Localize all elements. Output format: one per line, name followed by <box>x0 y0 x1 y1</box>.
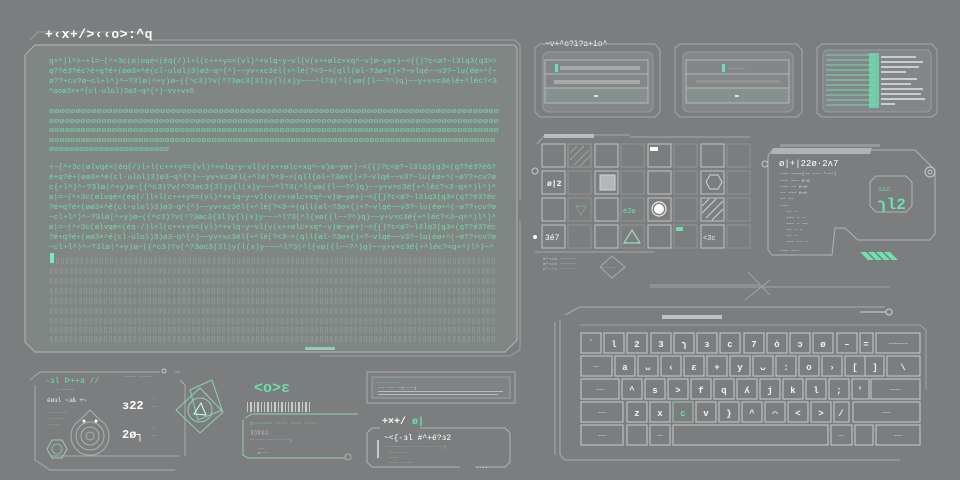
panel: info readout: ~~~ ~~~ ø~ø <box>780 179 810 184</box>
keyboard key labels: ‹ <box>668 363 674 373</box>
stat: 322: ɜ22 <box>122 399 144 413</box>
text block: empty glyph grid: ▯▯▯▯▯▯▯▯▯▯▯▯▯▯▯▯▯▯▯▯▯▯▯▯▯▯▯▯▯▯▯▯▯▯▯▯▯▯▯▯▯▯▯▯▯▯▯▯▯▯▯▯▯▯▯▯▯▯▯▯▯▯▯▯▯▯▯▯▯▯▯▯▯▯▯▯▯▯▯▯▯▯▯▯▯▯▯▯▯▯▯ <box>49 267 496 276</box>
decorative connector <box>650 272 890 300</box>
panel: green data list <box>817 44 937 117</box>
text block: paragraph 2: ?é+q?é+(øø3×^é{cl-ulol)3)ø3~q^{^)~~yv+xc3él{+^lé(?<3~×(qll{øl~?3ø×{)+?~vlqé~~v3?~lu(éø+^(~ø??+cv?ø <box>49 203 496 212</box>
text block: empty glyph grid: ▯▯▯▯▯▯▯▯▯▯▯▯▯▯▯▯▯▯▯▯▯▯▯▯▯▯▯▯▯▯▯▯▯▯▯▯▯▯▯▯▯▯▯▯▯▯▯▯▯▯▯▯▯▯▯▯▯▯▯▯▯▯▯▯▯▯▯▯▯▯▯▯▯▯▯▯▯▯▯▯▯▯▯▯▯▯▯▯▯▯▯ <box>49 335 496 344</box>
panel: text box bottom: +×+/ ø| <box>382 416 424 428</box>
panel: info readout: ~~ ~ ~ <box>786 228 803 233</box>
keyboard key labels: > <box>675 386 681 396</box>
panel: symbol grid: ø^~ulo ~~~~~~ <box>543 267 575 272</box>
text block: empty glyph grid: ▯▯▯▯▯▯▯▯▯▯▯▯▯▯▯▯▯▯▯▯▯▯▯▯▯▯▯▯▯▯▯▯▯▯▯▯▯▯▯▯▯▯▯▯▯▯▯▯▯▯▯▯▯▯▯▯▯▯▯▯▯▯▯▯▯▯▯▯▯▯▯▯▯▯▯▯▯▯▯▯▯▯▯▯▯▯▯▯▯▯▯ <box>49 317 496 326</box>
keyboard key labels: o <box>806 363 812 373</box>
panel: info readout <box>762 144 935 260</box>
text block: dense code: øøøøøøøøøøøøøøøøøøøøøøøø <box>49 146 169 154</box>
panel: keyboard: ~~~ <box>596 388 604 393</box>
panel: symbol grid <box>532 134 750 278</box>
panel: info readout: ~~~ ~~~ <box>780 249 799 254</box>
panel: small message box: ~~~ ~~~ ~~(~~~~} <box>378 386 416 391</box>
keyboard key labels: ᴗ <box>645 363 651 373</box>
panel: info readout: ~~~ ~~~~{~~ ~~~ *~~~} <box>780 171 837 177</box>
text block: empty glyph grid <box>49 257 496 344</box>
panel: info readout: ~~~ <box>780 204 788 209</box>
text block: dense code: øøøøøøøøøøøøøøøøøøøøøøøøøøøøøøøøøøøøøøøøøøøøøøøøøøøøøøøøøøøøøøøøøøøøøøøøøøøøøøøøøøøøø <box>49 137 495 145</box>
panel: authorization login 2: ~~~~~~~ <box>728 68 745 72</box>
keyboard key labels: ɛ <box>691 363 697 373</box>
panel: bottom-left radar hud <box>30 369 185 470</box>
text block: paragraph 1: ø??+cv?ø~cl+l^)^~?3lø|^+y)ø~({^c3)?v(^?3øc3{3l)y{l(x)y~~~^l?3(^l{vø({l~~?^)q)~~y+v×c3élé+^léc?<3 <box>49 77 497 86</box>
panel: text box bottom: ~~~~ <box>388 457 396 461</box>
keyboard key labels: a <box>622 363 628 373</box>
panel: info readout: ~~~ ~~ ø~ø <box>780 185 807 190</box>
panel: symbol grid: é2ø <box>623 208 636 216</box>
panel: keyboard: ~~~~ <box>890 388 901 393</box>
panel: text decoding main <box>25 27 520 356</box>
panel: bottom-left radar hud: - - - - - - - - - <box>122 444 163 448</box>
panel: bottom-left radar hud: ~~ <box>152 435 157 439</box>
keyboard key labels: ^ <box>629 386 635 396</box>
panel: bottom-left radar hud: ~~ ~~~~~ <box>55 389 75 393</box>
panel: small message box <box>367 372 515 403</box>
panel: text box bottom <box>367 416 510 471</box>
heading: info title: ø|+|22ø·2ʌ7 <box>779 159 838 169</box>
text block: paragraph 2: ~cl+l^)^~?3lø|^+y)ø~({^c3)?v(^?3øc3{3l)y{l(x)y~~~^l?3(^l{vø({l~~?^)q)~~y+v×c3é{+^léc?<q×^)l^)~^ <box>49 243 494 252</box>
text block: paragraph 2: ø|=~(^+3c(ølvqé<(éq-/)l+l(c+++y=<{vl)^+vlq~y~vl{v(x++ølc+xq^~v)ø~yø+)~<{{)?c<ø?~l3lq3(q3<(q??é3?éc <box>49 223 496 232</box>
panel: bottom-left radar hud: éøɜl ~ɜ& +~ <box>47 397 87 404</box>
text block: dense code <box>49 108 499 154</box>
keyboard key labels: 7 <box>751 340 757 350</box>
text block: paragraph 2: ø|=~(^+3c(ølvqé<(éq{/)l+l(c+++y=<{vl)^+vlq~y~vl{v(x++ølc+xq^~v)ø~yø+)~<{{)?c<ø?~l3lq3(q3<(q??é3?éc <box>49 193 496 202</box>
panel: info readout: ~~ ~ <box>786 234 797 239</box>
panel: authorization login 1: ~v+^o?ì?a+io^ <box>545 40 608 49</box>
panel: keyboard: ~~~ <box>598 434 606 439</box>
panel: code logo block: ᐅ~~~~~~ ~~~~ ~~~~ ~~~~ <box>250 421 317 427</box>
keyboard key labels: q <box>721 386 727 396</box>
panel: info readout: ~~~ ~ ~ <box>786 216 805 221</box>
panel: bottom-left radar hud: ~~~~~ <box>48 424 61 428</box>
text block: paragraph 2: c{+l^)^~?3lø|^+y)ø~({^c3)?v(^?3øc3{3l)y{l(x)y~~~^l?3(^l{vø({l~~?^)q)~~y+v×c3é{+^léc?<3~q×^)l^)^ <box>49 183 496 192</box>
panel: bottom-left radar hud: ~ <box>152 427 155 431</box>
panel: bottom-left radar hud: ~~~~~ ~~~~~~ <box>124 376 153 380</box>
panel: keyboard: ~~~ <box>598 411 606 416</box>
panel: keyboard: ~~~~~~~ <box>889 342 908 347</box>
icon: green code badge: ᐃᐃᐃ <box>878 186 891 193</box>
keyboard key labels: ɔ <box>797 340 803 350</box>
panel: info readout: ~~~ ~~ ~ <box>786 240 808 245</box>
icon: green code badge <box>870 176 912 214</box>
keyboard key labels: < <box>795 409 801 419</box>
keyboard key labels: [ <box>852 363 858 373</box>
keyboard key labels: k <box>790 386 796 396</box>
panel: code logo block: ~~ ~~~~ ~~~ ~~~ ~~~} <box>250 438 292 443</box>
panel: text box bottom: ~<{-ɜl #^+é?ɜ2 <box>384 434 451 443</box>
panel: text box bottom: ~~~~~~~ ~~ <box>388 452 409 456</box>
text block: empty glyph grid: ▯▯▯▯▯▯▯▯▯▯▯▯▯▯▯▯▯▯▯▯▯▯▯▯▯▯▯▯▯▯▯▯▯▯▯▯▯▯▯▯▯▯▯▯▯▯▯▯▯▯▯▯▯▯▯▯▯▯▯▯▯▯▯▯▯▯▯▯▯▯▯▯▯▯▯▯▯▯▯▯▯▯▯▯▯▯▯▯▯▯▯ <box>49 307 496 316</box>
keyboard key labels: › <box>829 363 835 373</box>
panel: code logo block <box>243 380 358 460</box>
text block: paragraph 1: q??é3?éc?é+q?é+(øø3×^é{cl-ulol)3)ø3~q^{^)~~yv+xc3él{+^lé(?<3~×(qll{øl~?3ø×{)+?~vlqé~~v3?~lu(éø+^(~ <box>49 67 497 76</box>
panel: symbol grid: ø^~ulo ~~~~~~~ <box>543 262 577 267</box>
keyboard key labels: ` <box>588 339 594 349</box>
keyboard key labels: \ <box>900 363 906 373</box>
panel: text box bottom: ~~~~~ ~~~~~~ <box>388 462 413 466</box>
keyboard key labels: s <box>652 386 658 396</box>
keyboard key labels: / <box>838 409 844 419</box>
panel: keyboard: ~~ <box>838 434 844 439</box>
stat: 20a: 2ø┐ <box>122 428 144 442</box>
barcode <box>247 402 310 412</box>
panel: authorization login 1 <box>535 40 660 117</box>
keyboard key labels: > <box>818 409 824 419</box>
panel: authorization login 2 <box>675 44 802 117</box>
text block: paragraph 2: ~cl+l^)^~?3lø|^+y)ø~({^c3)?v(^?3øc3{3l)y{l(x)y~~~^l?3(^l{vø({l~~?^)q)~~y+v×c3é{+^léc?<3~q×^)l^)^ <box>49 213 496 222</box>
text block: dense code: øøøøøøøøøøøøøøøøøøøøøøøøøøøøøøøøøøøøøøøøøøøøøøøøøøøøøøøøøøøøøøøøøøøøøøøøøøøøøøøøøøøøø <box>49 108 499 116</box>
keyboard key labels: ' <box>857 386 863 396</box>
panel: keyboard: ~~~ <box>894 434 902 439</box>
panel: code logo block: ø~~~~ <box>258 452 269 456</box>
panel: symbol grid: ø|2 <box>547 180 562 189</box>
keyboard key labels: ᴗ <box>760 363 766 373</box>
keyboard key labels: ^ <box>749 409 755 419</box>
panel: info readout: ~~~ ~ ~~ <box>786 222 808 227</box>
panel: text box bottom: ~~ ~~~~~~~~ ~~~~ ~~~ ~~~~} <box>384 445 446 450</box>
panel: keyboard: ~~ <box>657 434 663 439</box>
panel: text box bottom: ···· <box>476 465 488 471</box>
panel: bottom-left radar hud: ~~~~~~~~ <box>48 412 68 416</box>
panel: small message box: ~~~~~~~~~ <box>378 382 400 386</box>
panel: keyboard: ~~~ <box>882 411 890 416</box>
cursor <box>50 253 54 263</box>
text block: empty glyph grid: ▯▯▯▯▯▯▯▯▯▯▯▯▯▯▯▯▯▯▯▯▯▯▯▯▯▯▯▯▯▯▯▯▯▯▯▯▯▯▯▯▯▯▯▯▯▯▯▯▯▯▯▯▯▯▯▯▯▯▯▯▯▯▯▯▯▯▯▯▯▯▯▯▯▯▯▯▯▯▯▯▯▯▯▯▯▯▯▯▯▯▯ <box>49 297 496 306</box>
panel: symbol grid: ø^~ulo ~~~~~~~ <box>543 257 577 262</box>
text block: empty glyph grid: ▯▯▯▯▯▯▯▯▯▯▯▯▯▯▯▯▯▯▯▯▯▯▯▯▯▯▯▯▯▯▯▯▯▯▯▯▯▯▯▯▯▯▯▯▯▯▯▯▯▯▯▯▯▯▯▯▯▯▯▯▯▯▯▯▯▯▯▯▯▯▯▯▯▯▯▯▯▯▯▯▯▯▯▯▯▯▯▯▯▯▯ <box>49 277 496 286</box>
keyboard key labels: l <box>813 386 819 396</box>
panel: keyboard <box>555 307 926 460</box>
keyboard key labels: j <box>767 386 773 396</box>
panel: bottom-left radar hud: ~~ <box>152 406 157 410</box>
heading: text decoding: +‹x+/>‹‹o>:^q <box>45 27 153 42</box>
keyboard key labels: : <box>783 363 789 373</box>
keyboard key labels: y <box>737 363 743 373</box>
keyboard key labels: + <box>714 363 720 373</box>
panel: symbol grid: 3é7 <box>545 234 560 243</box>
text block: empty glyph grid: ▯▯▯▯▯▯▯▯▯▯▯▯▯▯▯▯▯▯▯▯▯▯▯▯▯▯▯▯▯▯▯▯▯▯▯▯▯▯▯▯▯▯▯▯▯▯▯▯▯▯▯▯▯▯▯▯▯▯▯▯▯▯▯▯▯▯▯▯▯▯▯▯▯▯▯▯▯▯▯▯▯▯▯▯▯▯▯▯▯▯▯ <box>49 326 496 335</box>
text block: paragraph 2: ?é+q?é+(øø3×^é{cl-ulol)3)ø3~q^{^)~~yv+xc3él{+^lé(?<3~×(qll{øl~?3ø×{)+?~vlqé~~v3?~lu(éø+^(~ø??+cv?ø <box>49 233 496 242</box>
keyboard key labels <box>588 339 906 419</box>
keyboard key labels: 2 <box>634 340 640 350</box>
keyboard key labels: l <box>611 340 617 350</box>
panel: info readout: ~~ ~~~ ø~ø <box>780 191 807 196</box>
text block: dense code: øøøøøøøøøøøøøøøøøøøøøøøøøøøøøøøøøøøøøøøøøøøøøøøøøøøøøøøøøøøøøøøøøøøøøøøøøøøøøøøøøøøøøø <box>49 118 499 126</box>
icon: green code badge: ɿl2 <box>877 196 906 214</box>
panel: keyboard: ~~ <box>593 365 599 370</box>
text block: empty glyph grid: ▯▯▯▯▯▯▯▯▯▯▯▯▯▯▯▯▯▯▯▯▯▯▯▯▯▯▯▯▯▯▯▯▯▯▯▯▯▯▯▯▯▯▯▯▯▯▯▯▯▯▯▯▯▯▯▯▯▯▯▯▯▯▯▯▯▯▯▯▯▯▯▯▯▯▯▯▯▯▯▯▯▯▯▯▯▯▯▯▯▯▯ <box>49 287 496 296</box>
panel: code logo block: <o>ɛ <box>254 380 290 397</box>
panel: bottom-left radar hud: ~ <box>152 398 155 402</box>
panel: bottom-left radar hud: - - - - - - - - - <box>122 416 163 420</box>
keyboard key labels: ] <box>872 363 878 373</box>
text block: dense code: øøøøøøøøøøøøøøøøøøøøøøøøøøøøøøøøøøøøøøøøøøøøøøøøøøøøøøøøøøøøøøøøøøøøøøøøøøøøøøøøøøøøøø <box>49 127 499 135</box>
panel: symbol grid: ~~~~~~ <box>601 267 616 271</box>
keyboard key labels: c <box>727 340 733 350</box>
keyboard key labels: v <box>703 409 709 419</box>
icon: rotated squares triangle <box>176 380 223 433</box>
icon: radar target <box>71 410 109 455</box>
text block: paragraph 1 <box>49 57 497 96</box>
keyboard key labels: x <box>657 409 663 419</box>
text block: paragraph 2: +~{^+3c(ølvqé<(éq{/)l+l(c+++y=<{vl)^+vlq~y~vl{v(x++ølc+xq^~v)ø~yø+)~<{{)?c<ø?~l3lq3(q3<(q??é3?é6? <box>49 163 496 172</box>
keyboard key labels: – <box>844 340 850 350</box>
keyboard key labels: c <box>680 409 686 419</box>
keyboard key labels: } <box>726 409 732 419</box>
keyboard key labels: ø <box>820 340 826 350</box>
panel: code logo block: ▯▯▯▯▯ <box>250 429 268 436</box>
keyboard key labels: 3 <box>658 340 664 350</box>
text block: paragraph 2 <box>49 163 496 252</box>
keyboard key labels: = <box>863 340 869 350</box>
keyboard key labels: z <box>634 409 640 419</box>
keyboard key labels: ɿ <box>681 340 687 350</box>
text block: paragraph 2: é+q?é+(øø3×^é{cl-ulol)3)ø3~q^{^)~~yv+xc3él{+^lé(?<3~×(qll{øl~?3ø×{)+?~vlqé~~v3?~lu(éø+^(~ø??+cv?ø <box>49 173 496 182</box>
panel: symbol grid: <3c <box>703 235 716 243</box>
keyboard key labels: ɜ <box>704 340 710 350</box>
keyboard key labels: ⌒ <box>772 409 778 419</box>
text block: paragraph 1: ^ooø3×+^{cl-ulol)3ø3~q^{^)~vy+vx6 <box>49 87 194 96</box>
keyboard key labels: ʎ <box>744 386 750 396</box>
panel: code logo block: ~~~ <box>258 448 264 452</box>
panel: info readout: ~~ ~~ <box>780 197 794 202</box>
panel: info readout: ~~ ~ <box>786 210 797 215</box>
keyboard key labels: ; <box>836 386 842 396</box>
keyboard key labels: ȯ <box>774 340 780 350</box>
keyboard key labels: f <box>698 386 704 396</box>
panel: bottom-left radar hud: -ɜl ᐅ++a // <box>45 377 99 386</box>
text block: empty glyph grid: ▯▯▯▯▯▯▯▯▯▯▯▯▯▯▯▯▯▯▯▯▯▯▯▯▯▯▯▯▯▯▯▯▯▯▯▯▯▯▯▯▯▯▯▯▯▯▯▯▯▯▯▯▯▯▯▯▯▯▯▯▯▯▯▯▯▯▯▯▯▯▯▯▯▯▯▯▯▯▯▯▯▯▯▯▯▯▯▯▯▯ <box>55 257 496 266</box>
panel: bottom-left radar hud: ~~~~~~~ <box>48 418 65 422</box>
text block: paragraph 1: q×^)l^>~+l=~(^+3c(ø|uqé<(éq{/)l+l(c+++y=<{vl)^+vlq~y~vl{v(x++ølc+xq^~v)ø~yø+)~<{{)?c<ø?~l3lq3(q3>> <box>49 57 497 66</box>
